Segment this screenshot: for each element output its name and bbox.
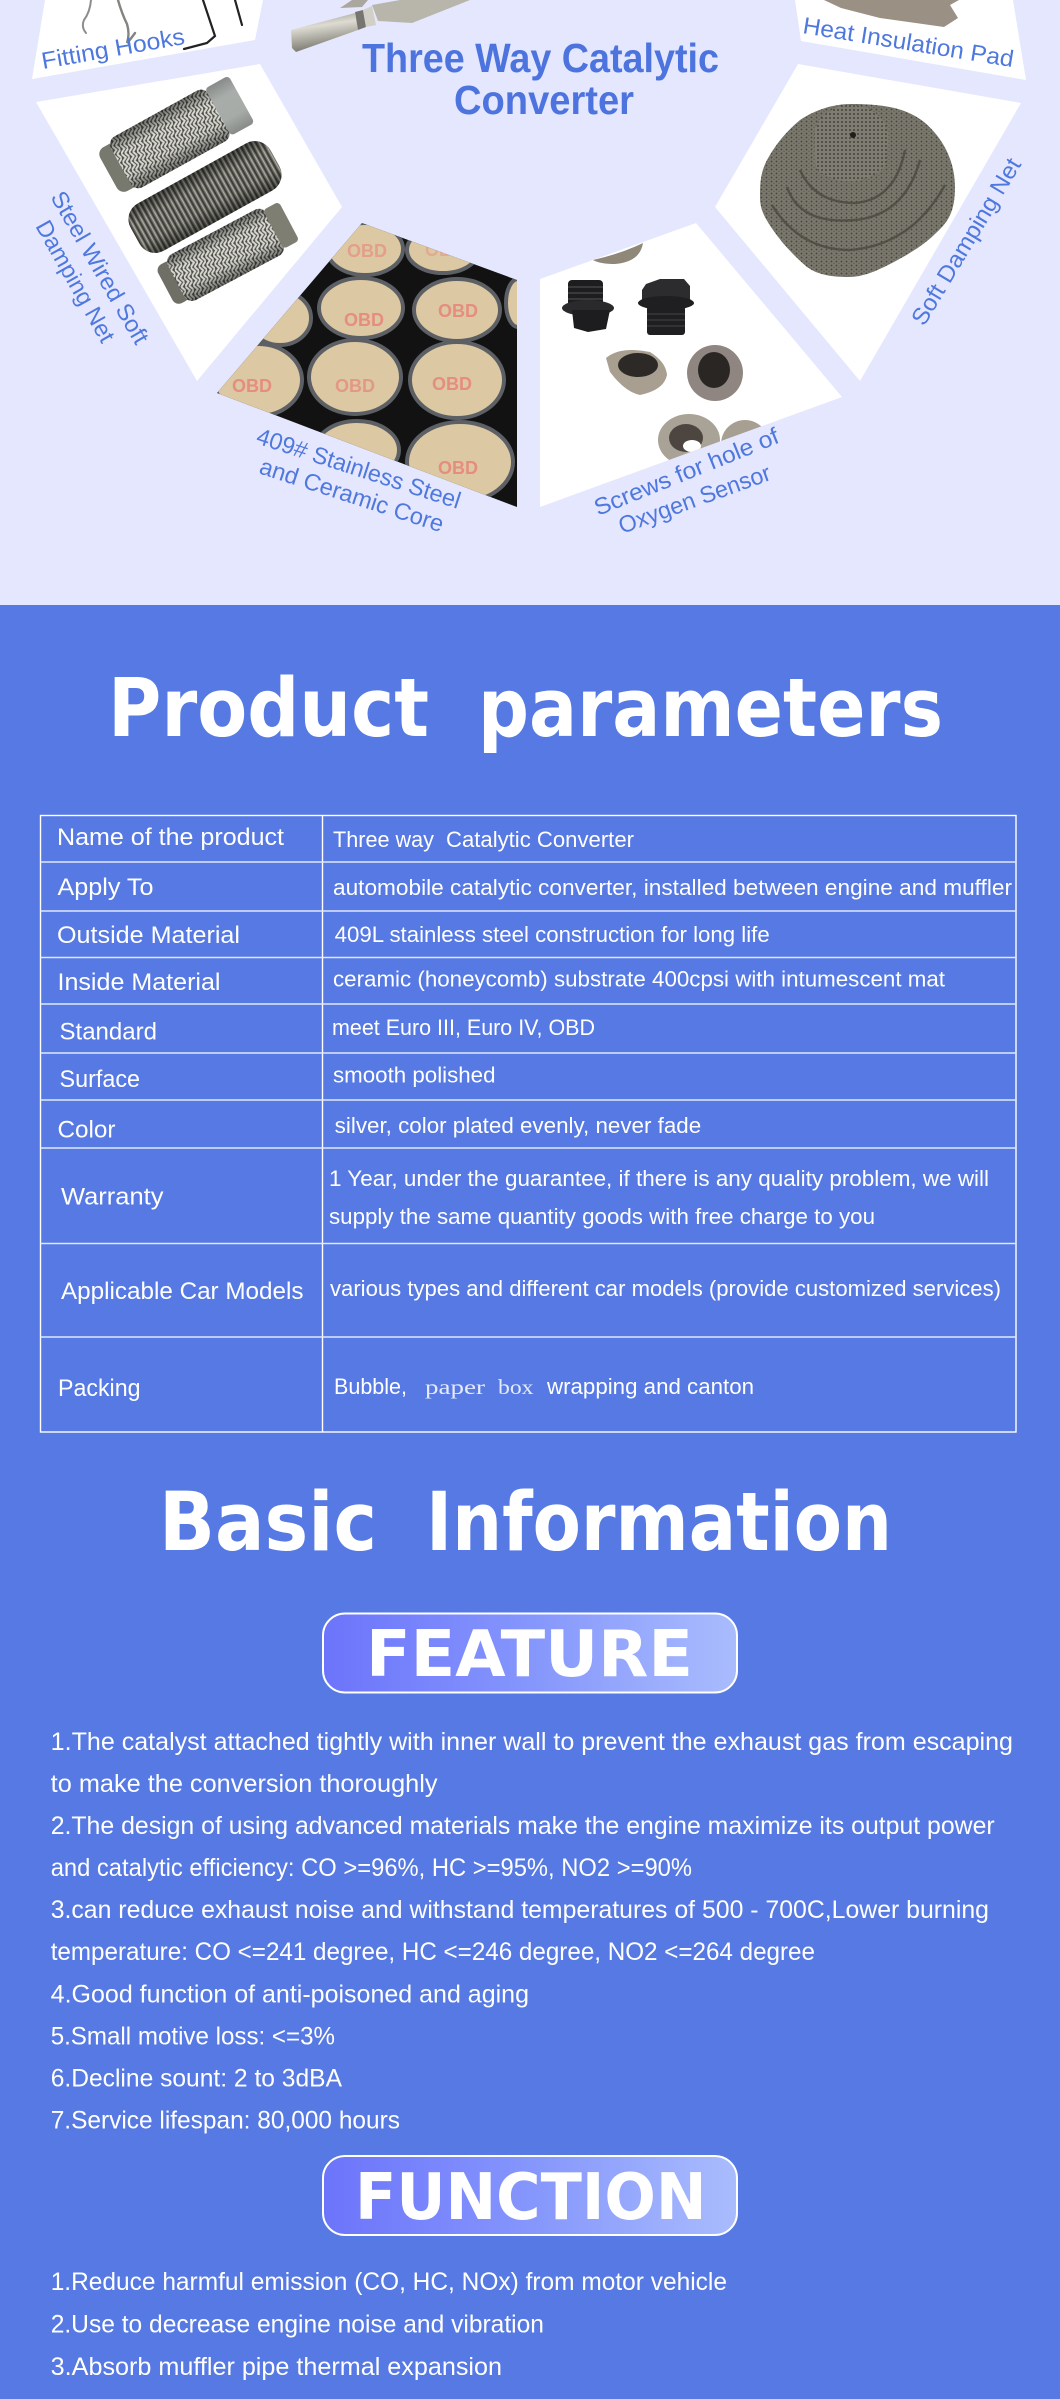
- row: apply to: Apply To: [58, 874, 154, 901]
- row: outside material: [57, 922, 770, 949]
- text block: feature list: 3.can reduce exhaust noise and withstand temperatures of 500 - 700C,Lower burning: [51, 1896, 989, 1924]
- text block: feature list: 6.Decline sount: 2 to 3dBA: [51, 2064, 342, 2092]
- row: applicable car models: [61, 1276, 1001, 1305]
- row: apply to: [58, 874, 1012, 901]
- text marks on ceramic cores: OBD: [344, 310, 384, 330]
- text marks on ceramic cores: OBD: [438, 458, 478, 478]
- panel: steel wired soft damping net tile: [31, 64, 342, 381]
- text marks on ceramic cores: OBD: [232, 376, 272, 396]
- row: inside material: [58, 966, 945, 996]
- row: warranty: supply the same quantity goods with free charge to you: [329, 1204, 875, 1229]
- icon: silver nut two: [687, 345, 743, 401]
- row: name of the product: Three way: [333, 827, 434, 852]
- text block: feature list: 1.The catalyst attached tightly with inner wall to prevent the exhaust gas from escaping: [51, 1728, 1013, 1756]
- row: outside material: 409L stainless steel construction for long life: [335, 922, 770, 947]
- row: name of the product: Catalytic Converter: [446, 827, 634, 852]
- title: three way catalytic converter: Converter: [454, 77, 634, 123]
- row: packing: wrapping and canton: [546, 1374, 754, 1399]
- heading: product parameters: parameters: [478, 662, 943, 756]
- row: color: Color: [58, 1116, 116, 1144]
- heading: basic information: Information: [426, 1476, 892, 1570]
- panel: ceramic core tile: [217, 223, 517, 531]
- heading: product parameters: Product: [108, 662, 429, 756]
- text block: function list: [51, 2268, 727, 2381]
- icon: black bolt one: [562, 280, 614, 332]
- row: warranty: [61, 1166, 989, 1229]
- row: surface: [60, 1062, 496, 1093]
- text block: function list: 3.Absorb muffler pipe thermal expansion: [51, 2353, 502, 2381]
- icon: partial nut: [593, 243, 643, 264]
- icon: catalytic converter photo: [291, 0, 470, 52]
- icon: mesh damping net: [760, 104, 955, 277]
- heading: basic information: Basic: [159, 1476, 377, 1570]
- row: packing: box: [498, 1375, 534, 1399]
- text marks on ceramic cores: OBD: [347, 241, 387, 261]
- row: applicable car models: various types and different car models (provide customized services): [330, 1276, 1001, 1301]
- panel: heat insulation pad tile: [795, 0, 1026, 80]
- text block: feature list: 4.Good function of anti-poisoned and aging: [51, 1980, 529, 2008]
- row: name of the product: [57, 824, 634, 852]
- badge: function: FUNCTION: [355, 2161, 706, 2235]
- row: standard: meet Euro III, Euro IV, OBD: [332, 1015, 595, 1040]
- row: apply to: automobile catalytic converter, installed between engine and muffler: [333, 875, 1012, 900]
- icon: silver nut one: [606, 350, 667, 395]
- row: applicable car models: Applicable Car Models: [61, 1278, 304, 1305]
- icon: silver nut four: [721, 420, 762, 441]
- icon: silver nut three: [658, 414, 720, 460]
- title: three way catalytic converter: [362, 35, 719, 123]
- text marks on ceramic cores: [232, 240, 478, 478]
- row: outside material: Outside Material: [57, 922, 240, 949]
- row: packing: Bubble,: [334, 1374, 407, 1399]
- icon: heat insulation pad: [824, 0, 959, 27]
- icon: flexible pipe two: [122, 135, 288, 259]
- text marks on ceramic cores: OBD: [425, 240, 465, 260]
- row: name of the product: Name of the product: [57, 824, 284, 851]
- row: standard: [60, 1015, 595, 1046]
- badge: feature: FEATURE: [366, 1618, 693, 1692]
- row: warranty: 1 Year, under the guarantee, if there is any quality problem, we will: [329, 1166, 989, 1191]
- row: packing: Packing: [58, 1375, 140, 1402]
- icon: flexible pipe three: [153, 198, 301, 310]
- label: soft damping net: Soft Damping Net: [906, 153, 1026, 330]
- label: stainless steel and ceramic core: and Ceramic Core: [256, 453, 447, 537]
- panel: light top background: [0, 0, 1060, 605]
- row: packing: paper: [425, 1375, 485, 1399]
- icon: black bolt two: [638, 279, 694, 335]
- text marks on ceramic cores: OBD: [432, 374, 472, 394]
- row: surface: smooth polished: [333, 1062, 496, 1088]
- heading: product parameters: [108, 662, 943, 756]
- text block: feature list: to make the conversion thoroughly: [51, 1770, 438, 1798]
- text block: feature list: 5.Small motive loss: <=3%: [51, 2022, 335, 2050]
- text block: function list: 2.Use to decrease engine noise and vibration: [51, 2310, 544, 2338]
- icon: flexible pipe one: [94, 74, 256, 198]
- title: three way catalytic converter: Three Way Catalytic: [362, 35, 719, 81]
- text marks on ceramic cores: OBD: [335, 376, 375, 396]
- row: surface: Surface: [60, 1066, 140, 1093]
- row: color: silver, color plated evenly, never fade: [335, 1113, 701, 1138]
- row: inside material: Inside Material: [58, 969, 221, 996]
- label: stainless steel and ceramic core: 409# Stainless Steel: [253, 423, 464, 514]
- text block: feature list: temperature: CO <=241 degree, HC <=246 degree, NO2 <=264 degree: [51, 1938, 815, 1966]
- panel: fitting hooks tile: [32, 0, 263, 79]
- text block: feature list: and catalytic efficiency: CO >=96%, HC >=95%, NO2 >=90%: [51, 1854, 692, 1882]
- text block: feature list: 2.The design of using advanced materials make the engine maximize its output power: [51, 1812, 995, 1840]
- text block: feature list: [51, 1728, 1013, 2134]
- label: screws for hole of oxygen sensor: Oxygen Sensor: [615, 459, 774, 539]
- row: color: [58, 1113, 701, 1144]
- row: warranty: Warranty: [61, 1184, 164, 1210]
- panel: screws tile: [540, 223, 842, 539]
- label: heat insulation pad: Heat Insulation Pad: [801, 12, 1016, 72]
- panel: soft damping net tile: [715, 64, 1026, 381]
- text block: feature list: 7.Service lifespan: 80,000 hours: [51, 2106, 400, 2134]
- text marks on ceramic cores: OBD: [438, 301, 478, 321]
- parameters table: [40, 816, 1016, 1432]
- label: steel wired soft damping net: Damping Net: [31, 216, 120, 347]
- label: fitting hooks: Fitting Hooks: [39, 23, 187, 74]
- label: screws for hole of oxygen sensor: Screws for hole of: [590, 423, 783, 521]
- icon: wire hooks: [83, 0, 242, 49]
- row: inside material: ceramic (honeycomb) substrate 400cpsi with intumescent mat: [333, 966, 945, 992]
- heading: basic information: [159, 1476, 892, 1570]
- row: standard: Standard: [60, 1018, 157, 1046]
- text block: function list: 1.Reduce harmful emission (CO, HC, NOx) from motor vehicle: [51, 2268, 727, 2296]
- label: steel wired soft damping net: Steel Wired Soft: [46, 186, 154, 349]
- panel: blue lower background: [0, 605, 1060, 2399]
- row: packing: [58, 1374, 754, 1402]
